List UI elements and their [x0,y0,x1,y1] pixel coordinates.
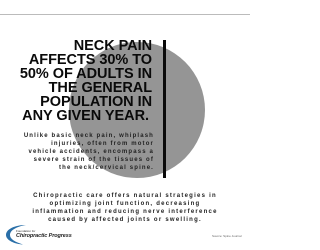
heading: POPULATION IN [40,94,152,110]
heading: 50% OF ADULTS IN [20,66,152,82]
text block: whiplash: vehicle accidents, encompass a [28,149,154,155]
divider line [0,14,250,15]
text block: whiplash [24,132,154,171]
text block: chiropractic care: inflammation and reducing nerve interference [32,209,218,215]
text block: chiropractic care: optimizing joint function, decreasing [50,201,200,207]
text block: chiropractic care: Chiropractic care offers natural strategies in [33,193,217,199]
text block: chiropractic care: caused by affected joints or swelling. [48,217,202,223]
text block: whiplash: severe strain of the tissues of [34,157,154,163]
heading: THE GENERAL [49,80,152,96]
logo small text: Foundation for [16,229,35,233]
heading: NECK PAIN [74,38,152,54]
logo name: Chiropractic Progress [16,233,72,239]
logo swoosh [6,225,26,244]
heading: ANY GIVEN YEAR. [22,108,149,124]
text block: chiropractic care [32,192,218,223]
text block: whiplash: injuries, often from motor [51,141,154,147]
heading [20,38,152,124]
text block: whiplash: the neck/cervical spine. [59,165,154,171]
vertical black line [163,40,166,178]
grey circle [69,42,205,178]
heading: AFFECTS 30% TO [29,52,152,68]
text block: whiplash: Unlike basic neck pain, whiplash [24,133,154,139]
source note: Source: Spine Journal [212,234,242,238]
logo: Foundation for Chiropractic Progress [6,225,72,244]
